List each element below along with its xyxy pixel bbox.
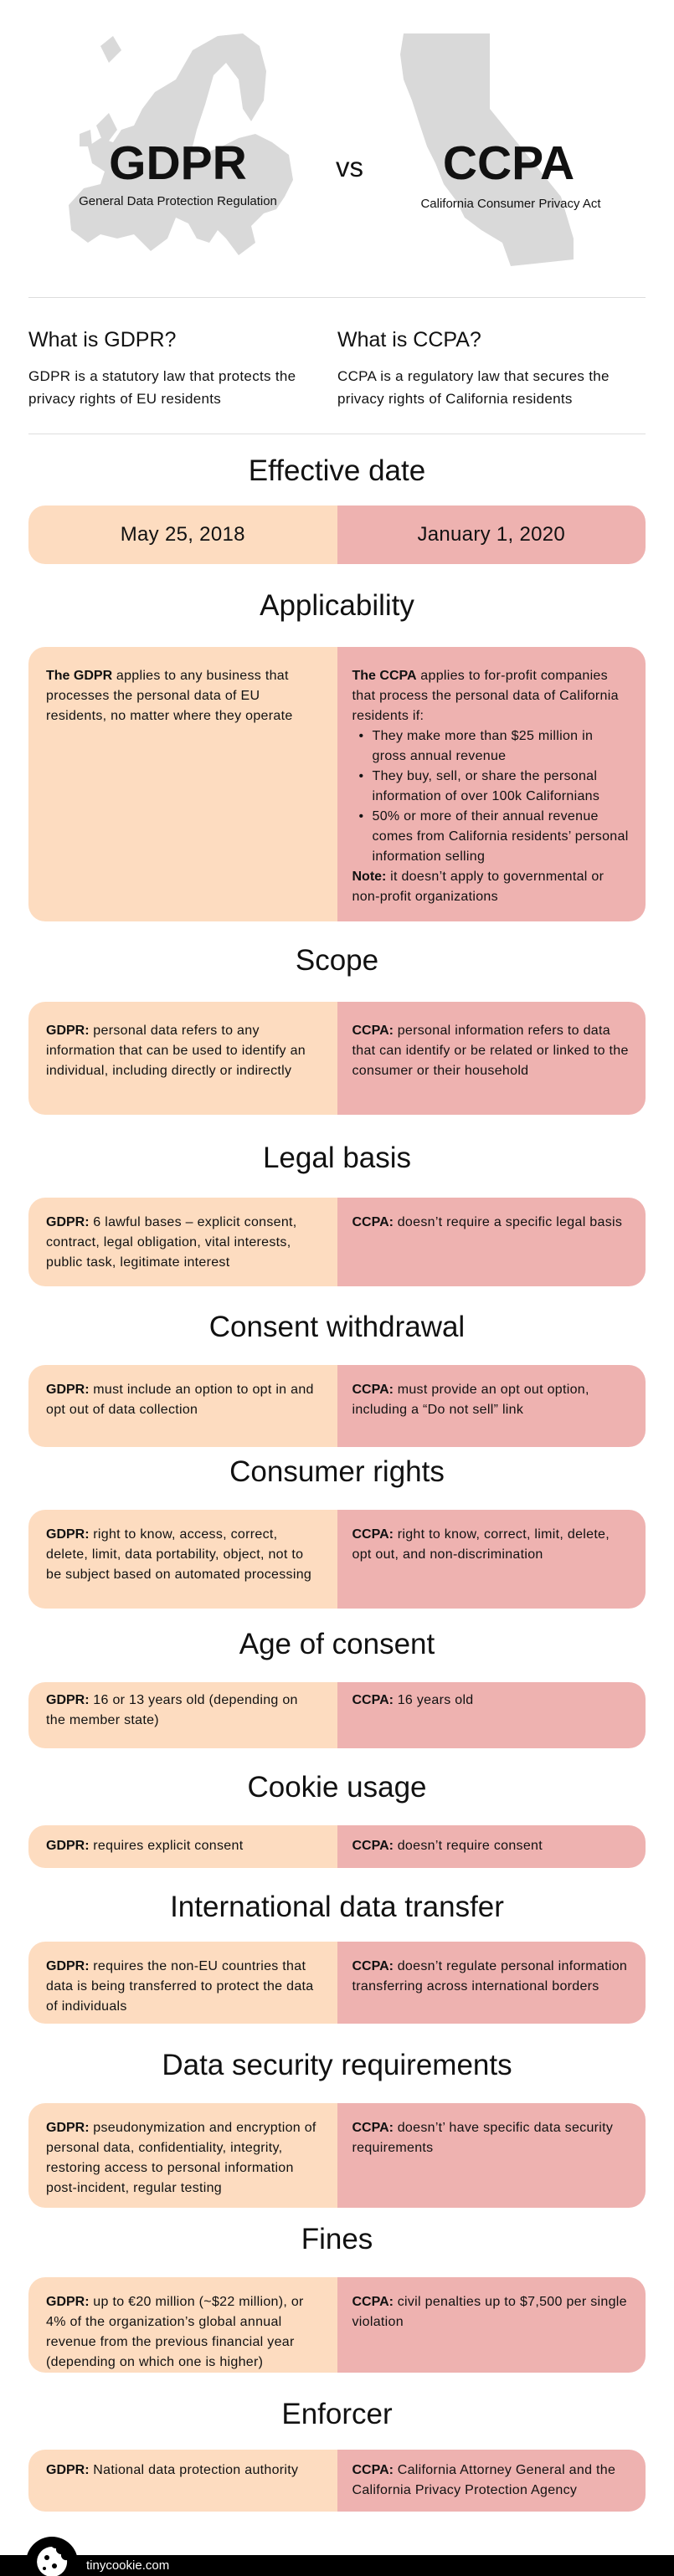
heading: applicability: Applicability: [260, 589, 414, 622]
box: effective date: May 25, 2018: [121, 523, 245, 546]
box: consent withdrawal: GDPR: must include an option to opt in and opt out of data collection: [46, 1383, 314, 1417]
box: applicability: They buy, sell, or share the personal information of over 100k Californians: [372, 769, 599, 803]
box: enforcer: CCPA: California Attorney General and the California Privacy Protection Agency: [352, 2463, 615, 2497]
box: international data transfer: GDPR: requires the non-EU countries that data is being transferred to protect the data of individuals: [46, 1959, 313, 2014]
heading: age of consent: Age of consent: [239, 1628, 435, 1660]
footer: [0, 2555, 674, 2576]
icon: cookie logo: [27, 2537, 77, 2576]
box: enforcer: GDPR: National data protection authority: [46, 2463, 298, 2477]
box: legal basis: GDPR: 6 lawful bases – explicit consent, contract, legal obligation, vital interests, public task, legitimate interest: [46, 1215, 297, 1270]
box: consumer rights: [28, 1510, 646, 1609]
heading: international data transfer: International data transfer: [170, 1891, 504, 1923]
what is CCPA: [337, 328, 610, 407]
box: legal basis: CCPA: doesn’t require a specific legal basis: [352, 1215, 622, 1229]
box: cookie usage: [28, 1825, 646, 1868]
heading: legal basis: Legal basis: [263, 1142, 411, 1174]
box: fines: GDPR: up to €20 million (~$22 million), or 4% of the organization’s global annual revenue from the previous financial year (depending on which one is higher): [46, 2295, 304, 2369]
box: consent withdrawal: CCPA: must provide an opt out option, including a “Do not sell” link: [352, 1383, 589, 1417]
what is CCPA: What is CCPA?: [337, 328, 481, 352]
box: fines: [28, 2277, 646, 2373]
box: enforcer: [28, 2450, 646, 2512]
box: cookie usage: CCPA: doesn’t require consent: [352, 1839, 543, 1853]
box: data security: GDPR: pseudonymization and encryption of personal data, confidentiality, integrity, restoring access to personal information post-incident, regular testing: [46, 2121, 316, 2195]
box: applicability: The CCPA applies to for-profit companies that process the personal data of California residents if: Note: it doesn’t apply to governmental or non-profit organizations: [352, 669, 619, 904]
footer text: tinycookie.com: [86, 2558, 169, 2573]
what is CCPA: CCPA is a regulatory law that secures the privacy rights of California residents: [337, 368, 610, 407]
subtitle: GDPR: General Data Protection Regulation: [79, 194, 277, 208]
box: applicability: The GDPR applies to any business that processes the personal data of EU residents, no matter where they operate: [46, 669, 293, 723]
box: effective date: January 1, 2020: [417, 523, 565, 546]
box: age of consent: CCPA: 16 years old: [352, 1693, 474, 1707]
box: data security: CCPA: doesn’t’ have specific data security requirements: [352, 2121, 613, 2155]
title: GDPR: GDPR: [109, 136, 247, 190]
subtitle: CCPA: California Consumer Privacy Act: [420, 197, 601, 211]
heading: consent withdrawal: Consent withdrawal: [209, 1311, 465, 1343]
heading: fines: Fines: [301, 2223, 373, 2255]
heading: enforcer: Enforcer: [281, 2398, 393, 2430]
box: fines: CCPA: civil penalties up to $7,500 per single violation: [352, 2295, 627, 2329]
box: effective date: [28, 505, 646, 564]
box: scope: [28, 1002, 646, 1115]
what is GDPR: What is GDPR?: [28, 328, 176, 352]
box: cookie usage: GDPR: requires explicit consent: [46, 1839, 243, 1853]
what is GDPR: [28, 328, 296, 407]
heading: effective date: Effective date: [249, 454, 425, 487]
map: europe: [69, 33, 293, 255]
box: scope: GDPR: personal data refers to any information that can be used to identify an individual, including directly or indirectly: [46, 1024, 306, 1078]
box: consumer rights: GDPR: right to know, access, correct, delete, limit, data portability, object, not to be subject based on automated processing: [46, 1527, 311, 1582]
heading: cookie usage: Cookie usage: [247, 1771, 427, 1804]
box: international data transfer: [28, 1942, 646, 2024]
box: legal basis: [28, 1198, 646, 1286]
heading: scope: Scope: [296, 944, 378, 977]
box: consent withdrawal: [28, 1365, 646, 1447]
box: applicability: 50% or more of their annual revenue comes from California residents’ personal information selling: [372, 809, 629, 864]
title: CCPA: CCPA: [443, 136, 574, 190]
box: applicability: [28, 647, 646, 921]
box: scope: CCPA: personal information refers to data that can identify or be related or linked to the consumer or their household: [352, 1024, 629, 1078]
map: california: [400, 33, 574, 266]
heading: data security requirements: Data security requirements: [162, 2049, 512, 2081]
box: international data transfer: CCPA: doesn’t regulate personal information transferring across international borders: [352, 1959, 627, 1994]
heading: consumer rights: Consumer rights: [229, 1455, 445, 1488]
box: age of consent: GDPR: 16 or 13 years old (depending on the member state): [46, 1693, 298, 1727]
box: age of consent: [28, 1682, 646, 1748]
box: consumer rights: CCPA: right to know, correct, limit, delete, opt out, and non-discrimination: [352, 1527, 610, 1562]
box: data security: [28, 2103, 646, 2208]
vs label: vs: [336, 151, 363, 182]
what is GDPR: GDPR is a statutory law that protects the privacy rights of EU residents: [28, 368, 296, 407]
box: applicability: They make more than $25 million in gross annual revenue: [372, 729, 593, 763]
